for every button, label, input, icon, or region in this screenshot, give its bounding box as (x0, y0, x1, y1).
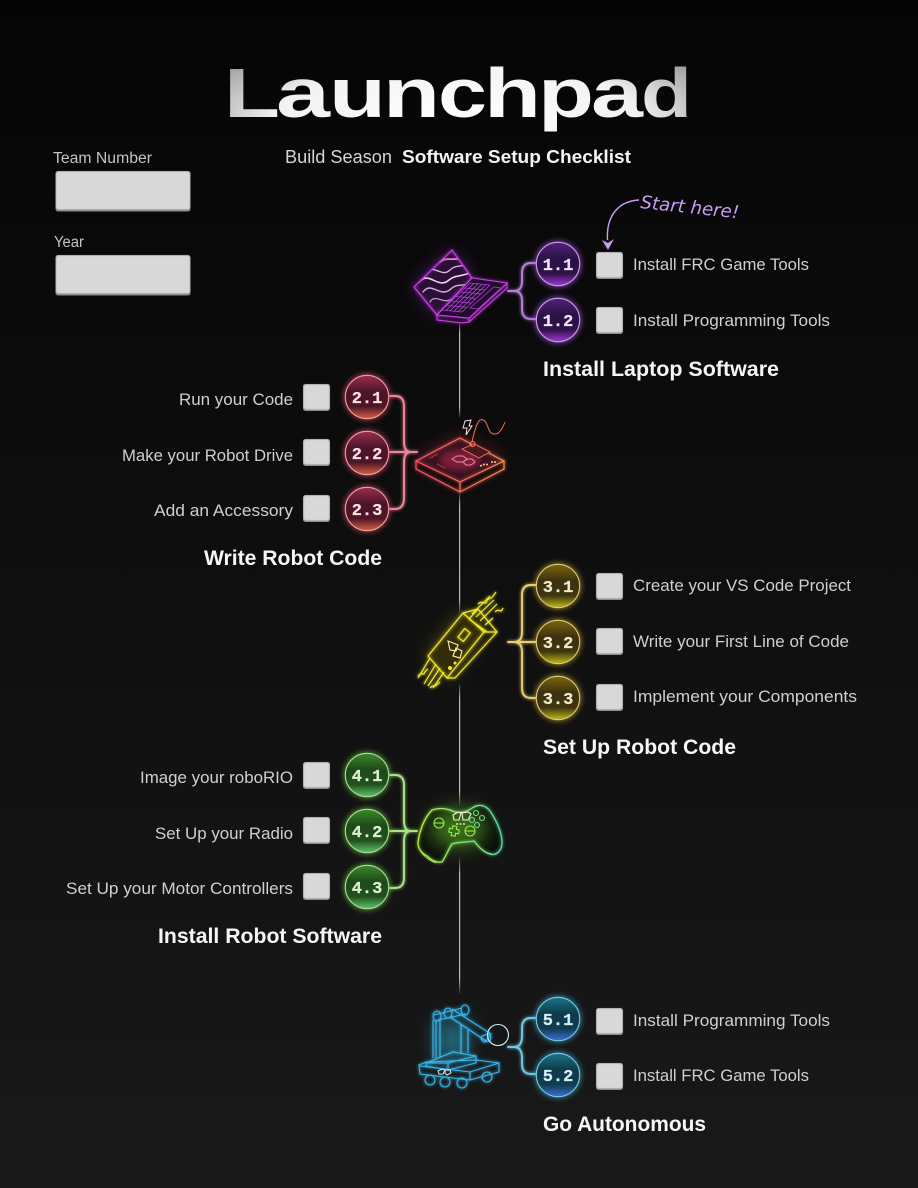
subtitle (285, 146, 631, 167)
year field (54, 234, 190, 296)
step 3.2 badge: 3.2 (543, 635, 573, 654)
step 2.3 checkbox (303, 495, 330, 522)
title: a (591, 54, 644, 132)
icon: laptop (414, 250, 507, 323)
step 2.3 badge: 2.3 (352, 502, 382, 521)
step 5.2 badge (535, 1052, 581, 1098)
step 5.2 badge: 5.2 (543, 1068, 573, 1087)
step 4.2 badge (344, 808, 390, 854)
panel: step 1 install laptop software (414, 241, 830, 381)
connector bracket 2 (390, 396, 417, 509)
step 5.1 badge (535, 996, 581, 1042)
callout: start here (602, 192, 740, 250)
callout: start here: Start here! (639, 192, 740, 223)
connector bracket 5 (508, 1018, 537, 1074)
title: n (383, 54, 440, 132)
step 2.1 badge: 2.1 (352, 390, 382, 409)
step 3.3 badge (535, 675, 581, 721)
title: a (276, 54, 331, 132)
step 4.1 checkbox (303, 762, 330, 789)
step 2.1 badge (344, 374, 390, 420)
step 3.2 badge (535, 619, 581, 665)
icon: robot arm (419, 1005, 508, 1088)
title: L (224, 54, 280, 132)
step 1.1 badge (535, 241, 581, 287)
step 5.1 label: Install Programming Tools (633, 1011, 830, 1030)
heading: install robot software: Install Robot Software (158, 924, 382, 948)
step 4.1 badge (344, 752, 390, 798)
panel: step 3 set up robot code (418, 563, 857, 759)
step 3.1 checkbox (596, 573, 623, 600)
subtitle: Software Setup Checklist (402, 146, 631, 167)
connector bracket 3 (508, 585, 536, 698)
step 4.1 badge: 4.1 (352, 768, 382, 787)
step 1.1 badge: 1.1 (543, 257, 573, 276)
subtitle: Build Season (285, 147, 392, 167)
step 4.2 badge: 4.2 (352, 824, 382, 843)
connector bracket 4 (390, 775, 417, 888)
step 2.1 label: Run your Code (179, 390, 293, 409)
step 2.2 badge: 2.2 (352, 446, 382, 465)
heading: install laptop software: Install Laptop Software (543, 357, 779, 381)
timeline connector (459, 322, 460, 994)
title: h (484, 54, 541, 132)
step 4.3 badge (344, 864, 390, 910)
step 1.1 label: Install FRC Game Tools (633, 255, 809, 274)
title: u (329, 54, 386, 132)
year field: Year (54, 234, 84, 251)
step 4.3 checkbox (303, 873, 330, 900)
title: p (538, 54, 594, 132)
heading: set up robot code: Set Up Robot Code (543, 735, 736, 759)
step 5.1 badge: 5.1 (543, 1012, 573, 1031)
panel: step 4 install robot software (66, 752, 502, 948)
step 4.2 checkbox (303, 817, 330, 844)
step 5.2 label: Install FRC Game Tools (633, 1066, 809, 1085)
step 1.2 checkbox (596, 307, 623, 334)
connector bracket 1 (508, 263, 537, 319)
panel: step 2 write robot code (122, 374, 505, 570)
step 1.2 badge: 1.2 (543, 313, 573, 332)
icon: motor controller (418, 592, 503, 688)
step 2.3 badge (344, 486, 390, 532)
step 2.2 checkbox (303, 439, 330, 466)
title: d (641, 54, 692, 132)
step 1.1 checkbox (596, 252, 623, 279)
step 1.2 badge (535, 297, 581, 343)
icon: circuit board (416, 419, 505, 492)
heading: go autonomous: Go Autonomous (543, 1112, 706, 1136)
team number field (53, 150, 190, 212)
step 2.3 label: Add an Accessory (154, 501, 294, 520)
step 1.2 label: Install Programming Tools (633, 311, 830, 330)
step 4.3 badge: 4.3 (352, 880, 382, 899)
heading: write robot code: Write Robot Code (204, 546, 382, 570)
step 3.3 checkbox (596, 684, 623, 711)
step 4.3 label: Set Up your Motor Controllers (66, 879, 293, 898)
step 3.1 label: Create your VS Code Project (633, 576, 851, 595)
step 3.1 badge: 3.1 (543, 579, 573, 598)
icon: game controller (418, 805, 502, 863)
step 2.2 badge (344, 430, 390, 476)
step 3.1 badge (535, 563, 581, 609)
step 3.2 checkbox (596, 628, 623, 655)
step 2.2 label: Make your Robot Drive (122, 446, 293, 465)
step 3.3 badge: 3.3 (543, 691, 573, 710)
step 4.2 label: Set Up your Radio (155, 824, 293, 843)
step 3.3 label: Implement your Components (633, 687, 857, 706)
step 2.1 checkbox (303, 384, 330, 411)
step 3.2 label: Write your First Line of Code (633, 632, 849, 651)
title: c (438, 54, 487, 132)
panel: step 5 go autonomous (419, 996, 830, 1136)
step 5.1 checkbox (596, 1008, 623, 1035)
team number field: Team Number (53, 150, 152, 167)
step 5.2 checkbox (596, 1063, 623, 1090)
step 4.1 label: Image your roboRIO (140, 768, 293, 787)
